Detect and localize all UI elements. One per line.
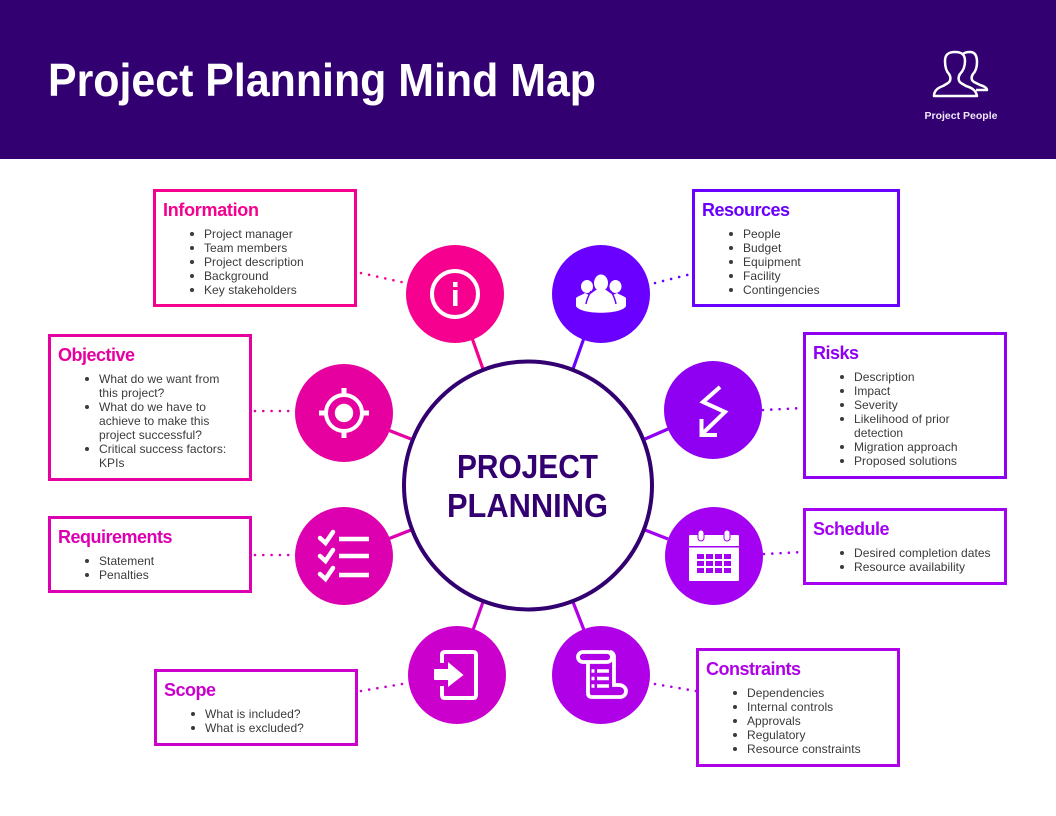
list: scope: What is included?	[205, 707, 301, 721]
dotted leaders	[255, 273, 803, 691]
list: constraints: Dependencies	[747, 686, 824, 700]
list: objective: KPIs	[99, 456, 125, 470]
panel: schedule	[803, 508, 1007, 585]
icon: requirements	[295, 507, 393, 605]
list: information: Key stakeholders	[204, 283, 297, 297]
list: constraints: Resource constraints	[747, 742, 861, 756]
connectors to hub	[388, 338, 668, 630]
heading: schedule: Schedule	[813, 519, 889, 539]
list: objective	[85, 372, 226, 470]
list: resources: Contingencies	[743, 283, 820, 297]
central hub: PLANNING	[447, 487, 608, 524]
icon: constraints	[552, 626, 650, 724]
list: risks: Migration approach	[854, 440, 958, 454]
heading: scope: Scope	[164, 680, 216, 700]
heading: requirements: Requirements	[58, 527, 172, 547]
heading: information: Information	[163, 200, 259, 220]
icon: schedule	[665, 507, 763, 605]
list: risks: Likelihood of prior	[854, 412, 950, 426]
panel: resources	[692, 189, 900, 307]
list: risks	[840, 370, 958, 468]
list: risks: Impact	[854, 384, 890, 398]
list: risks: detection	[854, 426, 903, 440]
list: schedule: Desired completion dates	[854, 546, 991, 560]
list: risks: Description	[854, 370, 915, 384]
panel: requirements	[48, 516, 252, 593]
icon: objective	[295, 364, 393, 462]
list: requirements	[85, 554, 154, 582]
list: objective: Critical success factors:	[99, 442, 226, 456]
list: information: Project description	[204, 255, 304, 269]
list: requirements: Statement	[99, 554, 154, 568]
icon: project people	[934, 52, 987, 96]
list: information: Background	[204, 269, 269, 283]
list: information: Project manager	[204, 227, 293, 241]
icon: resources	[552, 245, 650, 343]
heading: risks: Risks	[813, 343, 859, 363]
list: scope	[191, 707, 304, 735]
heading: constraints: Constraints	[706, 659, 801, 679]
panel: information	[153, 189, 357, 307]
list: resources: Facility	[743, 269, 781, 283]
panel: constraints	[696, 648, 900, 767]
central hub	[404, 362, 652, 610]
title: Project Planning Mind Map	[48, 54, 596, 106]
icon: risks	[664, 361, 762, 459]
central hub: PROJECT	[457, 448, 598, 485]
list: risks: Severity	[854, 398, 898, 412]
list: requirements: Penalties	[99, 568, 149, 582]
list: constraints: Internal controls	[747, 700, 833, 714]
panel: scope	[154, 669, 358, 746]
list: constraints: Regulatory	[747, 728, 806, 742]
list: schedule	[840, 546, 991, 574]
list: resources	[729, 227, 820, 297]
list: schedule: Resource availability	[854, 560, 965, 574]
icon caption: Project People	[925, 110, 998, 122]
list: objective: What do we want from	[99, 372, 219, 386]
list: constraints	[733, 686, 861, 756]
list: risks: Proposed solutions	[854, 454, 957, 468]
header band	[0, 0, 1056, 159]
icon: scope	[408, 626, 506, 724]
list: objective: What do we have to	[99, 400, 206, 414]
icon: information	[406, 245, 504, 343]
list: information: Team members	[204, 241, 287, 255]
list: information	[190, 227, 304, 297]
list: objective: this project?	[99, 386, 164, 400]
list: constraints: Approvals	[747, 714, 801, 728]
list: objective: project successful?	[99, 428, 202, 442]
list: objective: achieve to make this	[99, 414, 209, 428]
list: resources: People	[743, 227, 781, 241]
heading: resources: Resources	[702, 200, 790, 220]
panel: risks	[803, 332, 1007, 479]
list: scope: What is excluded?	[205, 721, 304, 735]
heading: objective: Objective	[58, 345, 135, 365]
list: resources: Equipment	[743, 255, 801, 269]
panel: objective	[48, 334, 252, 481]
list: resources: Budget	[743, 241, 781, 255]
